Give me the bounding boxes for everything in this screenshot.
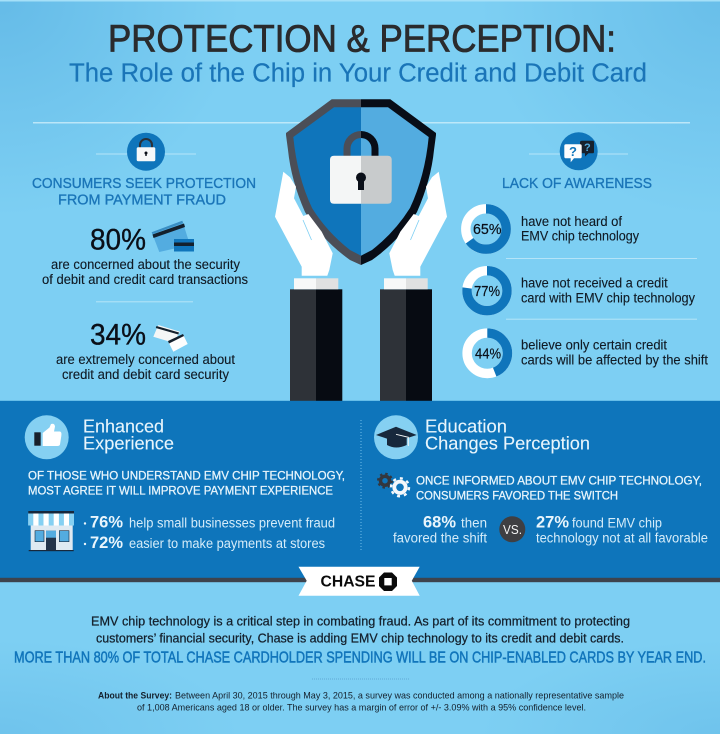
subheading: OF THOSE WHO UNDERSTAND EMV CHIP TECHNOLOGY, <box>28 468 345 482</box>
text: 77% description <box>521 276 695 306</box>
text: about the survey: About the Survey: <box>98 690 172 700</box>
text: 77% description: have not received a credit <box>521 276 668 291</box>
stat: 72%: 72% <box>90 534 123 552</box>
octagon logo <box>379 572 397 591</box>
text: closing statement <box>91 614 630 645</box>
text: about the survey <box>98 690 624 712</box>
dotted divider <box>529 154 628 155</box>
text: 80% description: of debit and credit card transactions <box>42 272 248 287</box>
icon: gears <box>378 474 409 496</box>
stat: 68%: then <box>461 516 487 531</box>
icon: cut cards <box>153 325 188 352</box>
icon: graduation cap <box>374 415 418 459</box>
donut: 44% <box>467 333 507 374</box>
stat: 76%: help small businesses prevent fraud <box>129 516 335 531</box>
heading: Changes Perception <box>425 432 590 453</box>
left hand <box>275 172 333 276</box>
text: 44% description <box>521 337 708 367</box>
blue band <box>0 401 720 578</box>
subheading <box>416 473 702 502</box>
text: about the survey: of 1,008 Americans aged 18 or older. The survey has a margin of error of +/- 3.09% with a 95% confidence level. <box>137 702 586 712</box>
text: closing statement: customers’ financial security, Chase is adding EMV chip technology to its credit and debit cards. <box>96 630 624 645</box>
heading: LACK OF AWARENESS <box>502 175 652 192</box>
donut: 77%: 77% <box>474 284 500 300</box>
panel: education changes perception <box>374 415 708 546</box>
ribbon: chase logo <box>298 567 420 596</box>
stat: 27% <box>536 514 708 546</box>
stat: 27%: technology not at all favorable <box>536 531 708 546</box>
stat: 68% <box>393 514 487 546</box>
icon: question bubbles: ? <box>584 142 591 154</box>
subheading: ONCE INFORMED ABOUT EMV CHIP TECHNOLOGY, <box>416 473 702 487</box>
stat: 76% <box>84 514 335 532</box>
text: 80% description: are concerned about the security <box>51 257 240 272</box>
donut: 65% <box>466 209 506 249</box>
left sleeve <box>290 289 342 401</box>
illustration: hands holding shield <box>275 99 447 401</box>
heading: Enhanced <box>83 416 164 437</box>
text: 80% description <box>42 257 248 287</box>
stat: 68%: favored the shift <box>393 531 487 546</box>
subheading: MOST AGREE IT WILL IMPROVE PAYMENT EXPERIENCE <box>28 483 333 497</box>
panel: lack of awareness <box>466 132 708 374</box>
heading: CONSUMERS SEEK PROTECTION <box>32 175 256 192</box>
icon: question bubbles: ? <box>569 144 577 159</box>
heading: FROM PAYMENT FRAUD <box>58 192 226 208</box>
icon: lock <box>127 133 165 171</box>
heading <box>83 416 174 453</box>
padlock <box>330 131 392 204</box>
icon: credit cards <box>152 221 194 252</box>
dark strip <box>0 578 720 582</box>
stat: 27%: 27% <box>536 514 569 532</box>
versus badge: VS. <box>503 522 522 537</box>
stat: 68%: 68% <box>423 514 456 532</box>
icon: thumbs up <box>25 415 69 459</box>
versus badge <box>499 516 525 542</box>
stat: 76%: 76% <box>90 514 123 532</box>
right hand <box>389 172 447 276</box>
donut: 65%: 65% <box>473 222 502 238</box>
title <box>69 19 647 88</box>
text: closing statement: EMV chip technology is a critical step in combating fraud. As part of its commitment to protecting <box>91 614 630 629</box>
stat: 27%: found EMV chip <box>572 516 662 531</box>
wordmark: CHASE <box>320 574 376 591</box>
text: about the survey: Between April 30, 2015 through May 3, 2015, a survey was conducted among a nationally representative sample <box>175 690 624 700</box>
right cuff <box>384 278 428 289</box>
text: 65% description <box>521 214 639 244</box>
shield <box>286 99 436 265</box>
stat: 34%: 34% <box>90 318 146 352</box>
dotted divider <box>96 154 196 155</box>
subheading: CONSUMERS FAVORED THE SWITCH <box>416 488 618 502</box>
text: 44% description: cards will be affected by the shift <box>521 352 708 367</box>
panel: consumers seek protection <box>32 133 256 382</box>
text: 44% description: believe only certain credit <box>521 337 667 352</box>
text: 77% description: card with EMV chip technology <box>521 291 695 306</box>
subtitle: The Role of the Chip in Your Credit and Debit Card <box>69 60 647 88</box>
donut: 77% <box>467 271 507 311</box>
stat: 80%: 80% <box>90 224 146 256</box>
heading <box>425 416 590 453</box>
text: 65% description: EMV chip technology <box>521 229 639 244</box>
main heading: PROTECTION & PERCEPTION: <box>108 19 616 61</box>
icon: storefront <box>28 511 74 551</box>
text: 34% description <box>56 352 235 382</box>
text: 34% description: credit and debit card security <box>62 367 229 382</box>
heading: Experience <box>83 432 174 453</box>
heading <box>32 175 256 208</box>
donut: 44%: 44% <box>475 346 501 362</box>
icon: question bubbles <box>560 132 598 170</box>
right sleeve <box>380 289 432 401</box>
panel: enhanced experience <box>25 415 345 552</box>
left cuff <box>294 278 338 289</box>
stat: 72% <box>84 534 325 552</box>
heading: Education <box>425 416 507 437</box>
text: 65% description: have not heard of <box>521 214 622 229</box>
text: 34% description: are extremely concerned about <box>56 352 235 367</box>
stat: 72%: easier to make payments at stores <box>129 536 325 551</box>
subheading <box>28 468 345 497</box>
